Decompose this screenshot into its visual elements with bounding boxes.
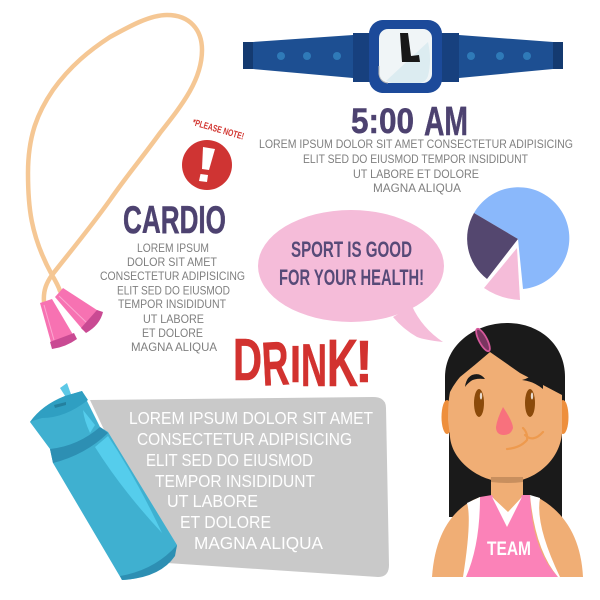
text block: time description: UT LABORE ET DOLORE bbox=[353, 167, 479, 181]
illustration: girl in team jersey bbox=[432, 323, 583, 577]
text block: time description: ELIT SED DO EIUSMOD TEMPOR INSIDIDUNT bbox=[303, 152, 529, 166]
text block: cardio description: UT LABORE bbox=[143, 312, 204, 326]
heading: 5:00 AM: AM bbox=[424, 98, 468, 144]
speech bubble bbox=[258, 210, 444, 342]
panel: drink text: MAGNA ALIQUA bbox=[194, 533, 323, 553]
text block: cardio description: MAGNA ALIQUA bbox=[131, 340, 217, 354]
heading: drink: I bbox=[290, 336, 301, 394]
text block: cardio description: DOLOR SIT AMET bbox=[127, 255, 218, 269]
text block: cardio description: ELIT SED DO EIUSMOD bbox=[117, 284, 230, 298]
speech bubble: SPORT IS GOOD bbox=[291, 237, 412, 262]
pie chart bbox=[467, 187, 569, 300]
icon: skipping rope bbox=[28, 15, 202, 349]
heading: 5:00 AM bbox=[351, 98, 468, 144]
heading: drink bbox=[233, 326, 373, 401]
heading: drink: R bbox=[260, 329, 291, 400]
heading: drink: ! bbox=[355, 329, 373, 395]
text block: cardio description: CONSECTETUR ADIPISICING bbox=[100, 269, 245, 283]
text block: cardio description: LOREM IPSUM bbox=[137, 241, 209, 255]
panel: drink text: CONSECTETUR ADIPISICING bbox=[137, 429, 352, 449]
heading: drink: K bbox=[327, 326, 358, 401]
icon: exclamation mark bbox=[182, 140, 232, 190]
panel: drink text: TEMPOR INSIDIDUNT bbox=[155, 471, 315, 491]
text block: time description: MAGNA ALIQUA bbox=[373, 181, 461, 195]
panel: drink text: LOREM IPSUM DOLOR SIT AMET bbox=[129, 408, 373, 428]
panel: drink text: ET DOLORE bbox=[180, 512, 271, 532]
text block: cardio description bbox=[100, 241, 245, 354]
text block: cardio description: TEMPOR INSIDIDUNT bbox=[118, 297, 227, 311]
panel: drink text: UT LABORE bbox=[167, 491, 258, 511]
illustration: girl in team jersey: TEAM bbox=[487, 539, 531, 560]
panel: drink text: ELIT SED DO EIUSMOD bbox=[146, 450, 313, 470]
heading: 5:00 AM: 5:00 bbox=[351, 102, 414, 141]
speech bubble: FOR YOUR HEALTH! bbox=[279, 265, 424, 290]
label: please note: *PLEASE NOTE! bbox=[191, 117, 245, 142]
panel: drink text bbox=[90, 397, 389, 577]
heading: cardio: CARDIO bbox=[123, 199, 226, 242]
text block: cardio description: ET DOLORE bbox=[142, 326, 203, 340]
heading: drink: D bbox=[233, 327, 262, 393]
icon: water bottle bbox=[30, 383, 177, 580]
text block: time description bbox=[259, 137, 573, 195]
heading: drink: N bbox=[301, 332, 327, 399]
icon: wristwatch bbox=[243, 20, 563, 93]
